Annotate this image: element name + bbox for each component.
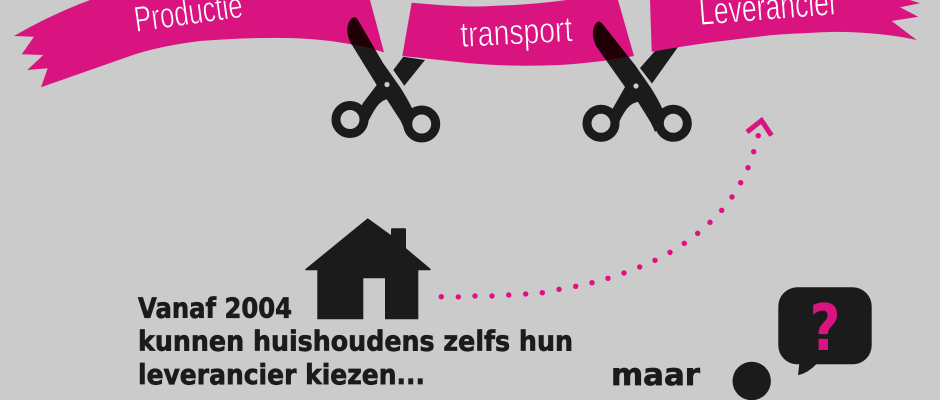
icon: dot [732, 362, 771, 400]
ribbon: Leverancier [650, 0, 920, 52]
scissor blade tips over ribbons [347, 17, 629, 60]
text: maar: maar [611, 358, 700, 393]
icon: house [305, 218, 431, 319]
text: Vanaf 2004: Vanaf 2004 [138, 292, 292, 324]
icon: speech bubble with question mark: ? [810, 292, 840, 366]
text: Vanaf 2004 [138, 292, 573, 391]
dotted arrow to Leverancier [439, 120, 772, 300]
icon: speech bubble with question mark [778, 287, 872, 375]
icon: right scissors [587, 22, 687, 137]
icon: left scissors [336, 17, 436, 138]
ribbon: transport: transport [459, 8, 573, 55]
text: Vanaf 2004: kunnen huishoudens zelfs hun [138, 326, 573, 358]
ribbon: transport [402, 0, 634, 66]
text: Vanaf 2004: leverancier kiezen... [138, 359, 425, 391]
ribbon: Productie [14, 0, 384, 87]
